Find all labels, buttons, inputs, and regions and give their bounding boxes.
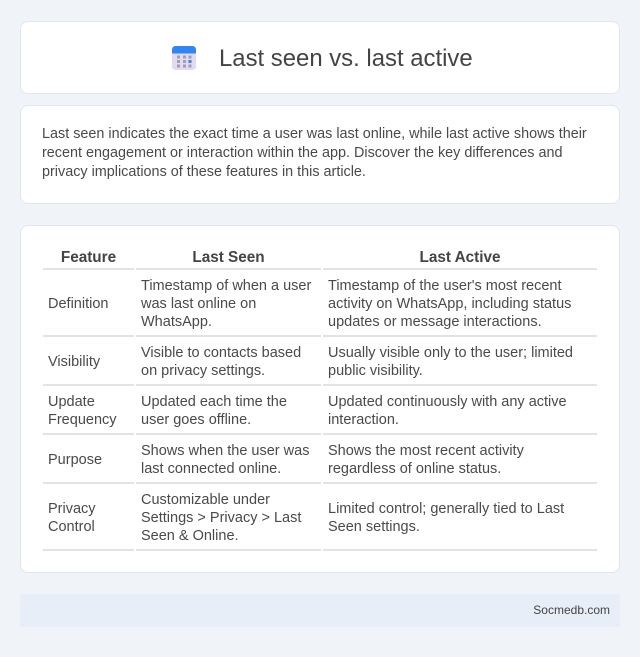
row: purpose: regardless of online status.: [328, 461, 501, 477]
row: update frequency: Updated each time the: [141, 394, 287, 410]
row: update frequency: Frequency: [48, 412, 117, 428]
table header: Last Seen: [192, 249, 265, 266]
table header: [61, 249, 501, 266]
row: purpose: last connected online.: [141, 461, 281, 477]
row: update frequency: Update: [48, 394, 95, 410]
row: privacy control: Customizable under: [141, 492, 270, 508]
row: purpose: Shows when the user was: [141, 443, 309, 459]
row: visibility: Usually visible only to the user; limited: [328, 345, 573, 361]
panel: comparison table: [20, 225, 620, 573]
row: purpose: [48, 443, 524, 477]
row: privacy control: Seen settings.: [328, 519, 420, 535]
row: purpose: Shows the most recent activity: [328, 443, 524, 459]
text block: introduction: recent engagement or interaction within the app. Discover the key differences and: [42, 145, 563, 161]
footer credit: Socmedb.com: [533, 603, 610, 617]
row: privacy control: [48, 492, 564, 544]
row: definition: [48, 278, 571, 330]
row: visibility: [48, 345, 573, 379]
row: definition: Timestamp of when a user: [141, 278, 311, 294]
table header: Feature: [61, 249, 116, 266]
footer bar: [20, 594, 620, 627]
row: definition: Definition: [48, 296, 108, 312]
row: purpose: Purpose: [48, 452, 102, 468]
row: visibility: Visible to contacts based: [141, 345, 301, 361]
panel: title card: [20, 21, 620, 94]
row: update frequency: interaction.: [328, 412, 399, 428]
table header: Last Active: [419, 249, 501, 266]
row: visibility: on privacy settings.: [141, 363, 265, 379]
row: definition: updates or message interactions.: [328, 314, 542, 330]
row: definition: activity on WhatsApp, including status: [328, 296, 571, 312]
row: privacy control: Privacy: [48, 501, 96, 517]
row: privacy control: Limited control; generally tied to Last: [328, 501, 564, 517]
row: definition: WhatsApp.: [141, 314, 212, 330]
panel: introduction: [20, 105, 620, 204]
row: update frequency: [48, 394, 567, 428]
icon: calendar: [172, 46, 196, 70]
row: visibility: public visibility.: [328, 363, 423, 379]
text block: introduction: [42, 126, 587, 180]
row: update frequency: user goes offline.: [141, 412, 251, 428]
row: update frequency: Updated continuously with any active: [328, 394, 567, 410]
row: definition: was last online on: [141, 296, 256, 312]
title: Last seen vs. last active: [219, 45, 473, 72]
text block: introduction: privacy implications of these features in this article.: [42, 164, 366, 180]
row: privacy control: Control: [48, 519, 95, 535]
row: visibility: Visibility: [48, 354, 100, 370]
row: definition: Timestamp of the user's most recent: [328, 278, 562, 294]
row: privacy control: Settings > Privacy > Last: [141, 510, 301, 526]
text block: introduction: Last seen indicates the exact time a user was last online, while last active shows their: [42, 126, 587, 142]
row: privacy control: Seen & Online.: [141, 528, 239, 544]
